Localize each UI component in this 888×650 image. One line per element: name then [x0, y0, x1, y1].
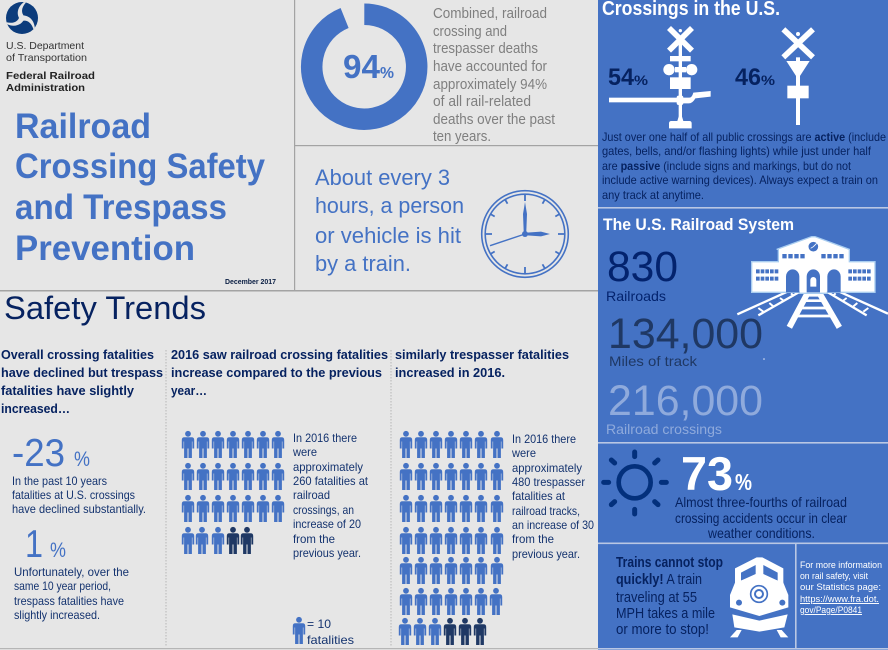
text: 480 fatalities — [511, 433, 594, 561]
stat: 54 percent: 54 — [608, 64, 635, 91]
stat: 216,000 crossings: 216,000 — [608, 377, 763, 425]
stat: 830 railroads: 830 — [607, 243, 678, 291]
column heading: 2016 saw railroad crossing fatalities — [171, 347, 388, 362]
panel: trains cannot stop — [616, 555, 788, 638]
text block: Just over one half of all public crossings are active (include — [602, 130, 886, 144]
text block: Almost three-fourths of railroad — [675, 494, 847, 510]
text block: trespasser deaths — [433, 41, 538, 57]
column: overall trend — [1, 347, 163, 622]
panel: more information: For more information — [800, 560, 882, 571]
text: 260 fatalities: previous year. — [293, 547, 361, 560]
panel: 94 percent: % — [380, 65, 394, 82]
text: 260 fatalities: In 2016 there — [293, 432, 357, 445]
text: 480 fatalities: from the — [512, 533, 554, 546]
statement: hours, a person — [315, 193, 464, 218]
title: Railroad — [15, 107, 151, 146]
panel: more information: our Statistics page: — [800, 582, 881, 593]
text block: any track at anytime. — [602, 188, 704, 202]
text: 480 fatalities: previous year. — [512, 548, 580, 561]
text block: crossing and — [433, 24, 507, 40]
text block: Trains cannot stop — [616, 555, 723, 571]
icon: USDOT triskelion — [6, 2, 38, 34]
stat: 46 percent: 46 — [735, 64, 761, 91]
text: 480 fatalities: approximately — [512, 462, 582, 475]
stat: 54 percent — [608, 64, 649, 91]
column heading: have declined but trespass — [1, 365, 163, 380]
text: 260 fatalities: approximately — [293, 461, 363, 474]
statement: or vehicle is hit — [315, 223, 461, 248]
stat: 46 percent — [735, 64, 776, 91]
text: 260 fatalities: from the — [293, 533, 335, 546]
column heading: year… — [171, 383, 207, 398]
icon: locomotive — [730, 557, 788, 637]
text block: ten years. — [433, 129, 491, 145]
column: trespasser fatalities — [395, 347, 594, 645]
text: 260 fatalities: were — [292, 446, 317, 459]
stat: 1 percent — [25, 523, 66, 566]
text block: or more to stop! — [616, 622, 709, 638]
text block — [675, 494, 847, 541]
text block — [616, 555, 723, 638]
statement — [315, 165, 464, 276]
text block: gates, bells, and/or flashing lights) while just under half — [602, 144, 872, 158]
text block: weather conditions. — [707, 525, 815, 541]
agency name: Federal Railroad — [6, 70, 95, 82]
panel: more information: on rail safety, visit — [800, 571, 868, 582]
panel: blue sidebar background — [598, 0, 888, 650]
text: 480 fatalities: In 2016 there — [512, 433, 576, 446]
text: increase: Unfortunately, over the — [14, 566, 129, 579]
stat: 54 percent: % — [634, 72, 649, 88]
title: and Trespass — [15, 188, 227, 227]
text: 480 fatalities: were — [511, 447, 536, 460]
legend: = 10 — [307, 618, 331, 631]
panel: more information: gov/Page/P0841 — [800, 605, 862, 616]
text block: of all rail-related — [433, 94, 531, 110]
title: Prevention — [15, 229, 195, 268]
text: increase — [14, 566, 129, 622]
text block: deaths over the past — [433, 112, 555, 128]
column heading: increased… — [1, 401, 70, 416]
column heading: increased in 2016. — [395, 365, 505, 380]
pictogram: 48 people — [399, 431, 503, 645]
stat: 73 percent: 73 — [681, 447, 733, 500]
text: 260 fatalities — [292, 432, 369, 560]
agency name: Administration — [6, 82, 85, 94]
column heading: increase compared to the previous — [171, 365, 382, 380]
text: 260 fatalities: increase of 20 — [293, 518, 361, 531]
icon: active crossing — [609, 28, 711, 128]
stat: 830 railroads: Railroads — [606, 288, 666, 304]
column heading — [395, 347, 569, 380]
column heading: Overall crossing fatalities — [1, 347, 154, 362]
icon: train station — [737, 237, 888, 327]
title — [15, 107, 265, 268]
text block: MPH takes a mile — [616, 606, 715, 622]
stat: minus 23 percent: % — [74, 448, 90, 471]
title: Crossing Safety — [15, 147, 265, 186]
text: 260 fatalities: railroad — [293, 489, 330, 502]
text: decline — [12, 475, 146, 516]
column heading — [1, 347, 163, 416]
stat: 216,000 crossings: Railroad crossings — [606, 421, 722, 437]
text block — [433, 6, 555, 145]
statement: by a train. — [315, 251, 411, 276]
agency name: U.S. Department — [6, 40, 84, 52]
stat: 1 percent: % — [50, 539, 66, 562]
text: 260 fatalities: 260 fatalities at — [293, 475, 369, 488]
panel: 94 percent — [312, 6, 555, 145]
text: 480 fatalities: railroad tracks, — [512, 505, 580, 518]
text: decline: have declined substantially. — [12, 503, 146, 516]
agency name — [6, 40, 95, 94]
panel: every 3 hours — [315, 165, 568, 277]
icon: sun — [604, 452, 666, 514]
donut value: 94 — [343, 48, 381, 85]
stat: 73 percent: % — [735, 469, 752, 495]
text: increase: slightly increased. — [14, 609, 100, 622]
stat: 46 percent: % — [761, 72, 776, 88]
stat: 134,000 miles: Miles of track — [609, 353, 698, 369]
stat: 134,000 miles: 134,000 — [608, 310, 763, 358]
text block: crossing accidents occur in clear — [675, 510, 847, 526]
text block: traveling at 55 — [616, 590, 697, 606]
pictogram: 26 people — [182, 431, 284, 554]
statement: About every 3 — [315, 165, 450, 190]
stat: minus 23 percent: -23 — [12, 432, 65, 475]
legend: fatalities — [307, 634, 354, 647]
text block: approximately 94% — [433, 77, 547, 93]
text: increase: same 10 year period, — [14, 580, 111, 593]
heading: The U.S. Railroad System — [603, 215, 794, 234]
date: December 2017 — [225, 277, 276, 286]
panel: U.S. railroad system — [603, 215, 888, 437]
text: decline: fatalities at U.S. crossings — [12, 489, 135, 502]
text block — [602, 130, 886, 202]
text block: have accounted for — [433, 59, 547, 75]
legend — [293, 617, 354, 647]
agency name: of Transportation — [6, 52, 87, 64]
column heading: similarly trespasser fatalities — [395, 347, 569, 362]
icon: clock — [482, 191, 568, 277]
panel: crossings in the U.S. — [602, 0, 886, 202]
panel: more information: https://www.fra.dot. — [800, 594, 879, 605]
text: 480 fatalities: 480 trespasser — [512, 476, 585, 489]
panel: logo — [6, 2, 95, 94]
stat: 1 percent: 1 — [25, 523, 43, 566]
heading: Safety Trends: Safety Trends — [4, 290, 206, 326]
text: increase: trespass fatalities have — [14, 595, 124, 608]
text: 480 fatalities: fatalities at — [512, 490, 566, 503]
panel: more information — [800, 560, 882, 616]
donut chart — [312, 14, 417, 119]
text: 480 fatalities: an increase of 30 — [512, 519, 594, 532]
column heading: fatalities have slightly — [1, 383, 135, 398]
column: crossing fatalities — [171, 347, 388, 647]
text block: are passive (include signs and markings, but do not — [602, 159, 852, 173]
text block: Combined, railroad — [433, 6, 547, 22]
panel: weather — [604, 447, 847, 541]
text: decline: In the past 10 years — [12, 475, 107, 488]
icon: passive crossing — [783, 29, 813, 125]
text block: quickly! A train — [616, 572, 702, 588]
text: 260 fatalities: crossings, an — [293, 504, 354, 517]
column heading — [171, 347, 388, 398]
